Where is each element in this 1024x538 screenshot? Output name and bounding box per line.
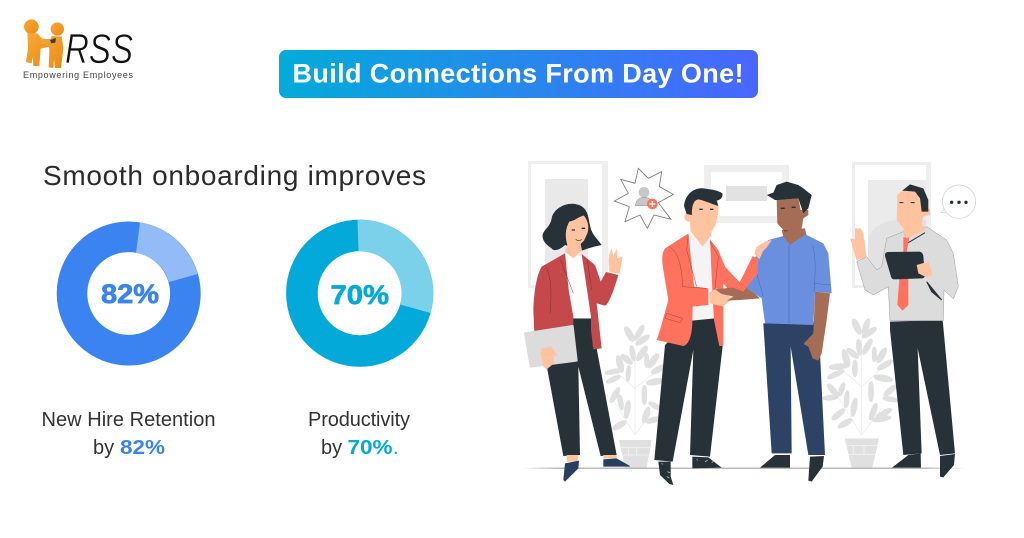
icon: two figures shaking hands: [24, 19, 64, 68]
donut chart: 82% new hire retention: [72, 222, 198, 350]
coral sleeve and hand on shoulder: [730, 240, 772, 292]
donut chart: 70% productivity: 70%: [330, 280, 389, 310]
label: new hire retention by 82%: 82%: [120, 437, 165, 459]
label: productivity by 70%: Productivity: [308, 409, 410, 431]
label: new hire retention by 82%: New Hire Retention: [42, 409, 216, 431]
label: productivity by 70%: .: [393, 437, 399, 459]
title banner: Build Connections From Day One!: [292, 58, 744, 88]
background windows: [528, 161, 931, 288]
donut chart: 82% new hire retention: 82%: [101, 279, 159, 309]
plant: right: [823, 318, 898, 468]
person: man with tablet: [850, 184, 958, 477]
logo wordmark: RSS: [65, 25, 133, 72]
label: productivity by 70%: 70%: [348, 437, 393, 459]
person: man in blue shirt: [709, 182, 832, 482]
logo tagline: Empowering Employees: [23, 70, 134, 80]
person: woman with laptop: [525, 204, 630, 482]
plant: left: [605, 325, 666, 468]
illustration: four colleagues meeting: [520, 161, 976, 485]
logo: HRSS: [23, 19, 134, 80]
label: new hire retention by 82%: by: [93, 437, 114, 459]
heading: smooth onboarding improves: Smooth onboarding improves: [43, 160, 426, 191]
label: new hire retention by 82%: [42, 409, 216, 459]
icon: add-user starburst: [614, 168, 673, 228]
label: productivity by 70%: [308, 409, 410, 459]
icon: speech bubble: [941, 185, 976, 218]
donut chart: 70% productivity: [302, 220, 433, 351]
ground line: [520, 468, 970, 469]
person: man in coral jacket: [654, 188, 745, 485]
label: productivity by 70%: by: [321, 437, 342, 459]
title banner: [279, 50, 758, 98]
